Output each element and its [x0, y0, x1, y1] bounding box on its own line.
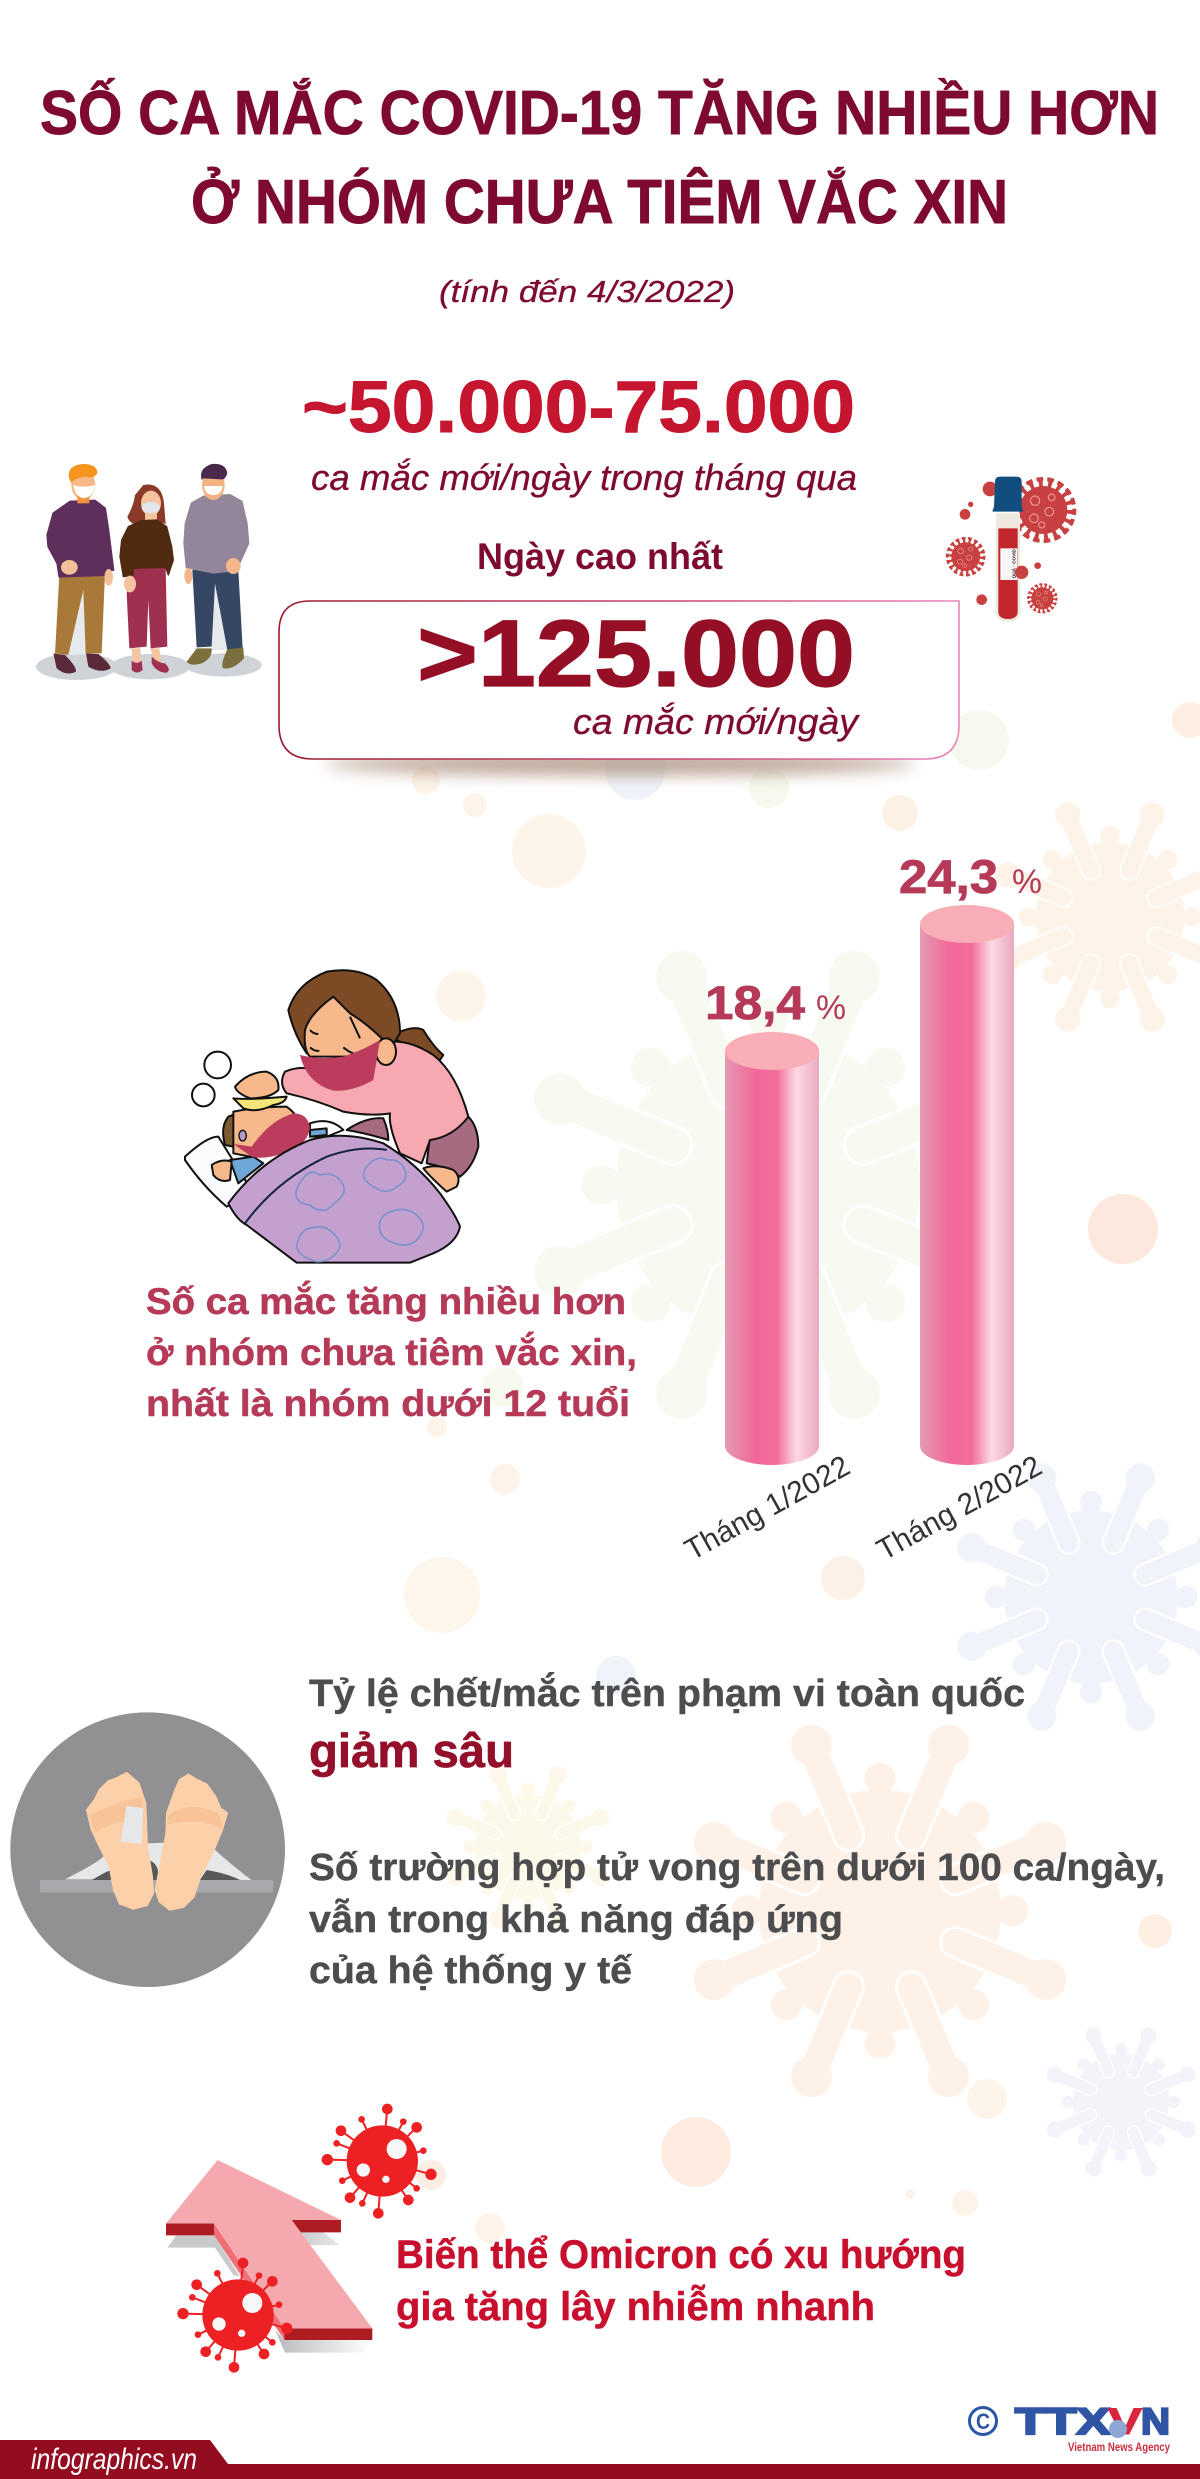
text: deaths per day: Số trường hợp tử vong trên dưới 100 ca/ngày,: [309, 1847, 1165, 1889]
title: [40, 79, 1159, 237]
stat: monthly new cases: ~50.000-75.000: [302, 367, 855, 448]
text: Omicron variant: Biến thể Omicron có xu hướng: [396, 2233, 966, 2277]
stat: monthly new cases: [302, 367, 857, 498]
text: deaths per day: [309, 1847, 1165, 1992]
footer band: infographics.vn: [31, 2443, 197, 2476]
illustration: three people in masks: [36, 464, 262, 680]
title: Ở NHÓM CHƯA TIÊM VẮC XIN: [191, 168, 1008, 237]
icon: rising arrow: [166, 2160, 372, 2353]
icon: red virus bottom: [177, 2258, 292, 2373]
bar: January 18.4%: [679, 976, 855, 1567]
bar chart: January vs February 2022: [679, 850, 1047, 1567]
logo: TTXVN: C: [976, 2409, 990, 2434]
text: deaths per day: vẫn trong khả năng đáp ứng: [309, 1897, 843, 1941]
text: death rate drop: [309, 1671, 1025, 1777]
callout: peak cases box: ca mắc mới/ngày: [573, 701, 860, 742]
text: more cases in unvaccinated group: ở nhóm chưa tiêm vắc xin,: [146, 1331, 637, 1373]
stat: monthly new cases: ca mắc mới/ngày trong tháng qua: [311, 457, 857, 498]
text: Omicron variant: gia tăng lây nhiễm nhanh: [396, 2283, 875, 2329]
text: deaths per day: của hệ thống y tế: [309, 1950, 633, 1992]
text: death rate drop: Tỷ lệ chết/mắc trên phạm vi toàn quốc: [309, 1671, 1025, 1715]
bar: January 18.4%: Tháng 1/2022: [679, 1450, 855, 1567]
icon: red virus top: [322, 2104, 437, 2219]
subtitle: date: (tính đến 4/3/2022): [439, 274, 735, 309]
bar: February 24.3%: %: [1012, 863, 1042, 901]
text: more cases in unvaccinated group: [146, 1280, 637, 1424]
logo: TTXVN: TTX: [1015, 2401, 1110, 2442]
bar: February 24.3%: [871, 850, 1047, 1567]
text: death rate drop: giảm sâu: [309, 1724, 514, 1777]
callout: peak cases box: >125.000: [417, 601, 855, 707]
illustration: test tube and virus: [947, 477, 1074, 622]
icon: feet on morgue table: [10, 1712, 285, 1987]
bar: January 18.4%: %: [816, 989, 846, 1027]
logo: TTXVN: Vietnam News Agency: [1068, 2442, 1171, 2454]
bar: January 18.4%: 18,4: [705, 976, 805, 1029]
text: more cases in unvaccinated group: nhất là nhóm dưới 12 tuổi: [146, 1383, 630, 1424]
illustration: test tube and virus: QUẢ · COVID: [1010, 548, 1016, 578]
callout: peak cases box: [279, 601, 959, 775]
logo: TTXVN: V: [1108, 2401, 1142, 2442]
logo: TTXVN: N: [1141, 2401, 1170, 2442]
bar: February 24.3%: Tháng 2/2022: [871, 1450, 1047, 1567]
background: faint viruses and dots: [404, 702, 1200, 2243]
text: Omicron variant: [396, 2233, 966, 2329]
logo: TTXVN: [970, 2401, 1171, 2454]
label: peak day: Ngày cao nhất: [477, 536, 723, 577]
illustration: mother caring for sick child: [185, 970, 478, 1263]
bar: February 24.3%: 24,3: [899, 850, 998, 903]
footer band: [0, 2440, 1200, 2479]
text: more cases in unvaccinated group: Số ca mắc tăng nhiều hơn: [146, 1280, 626, 1322]
